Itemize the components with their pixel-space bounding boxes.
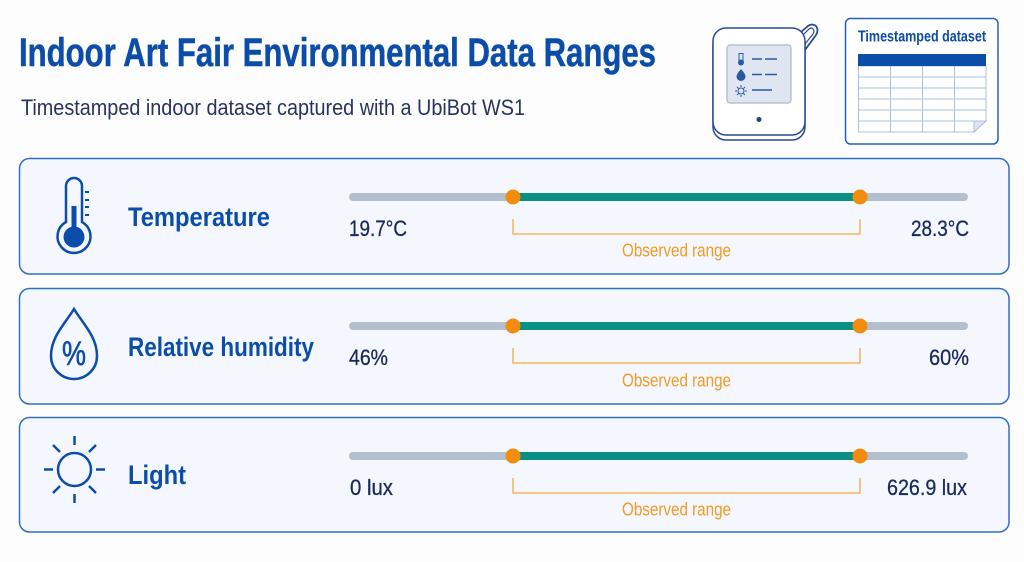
- minimum value: 0 lux: [350, 475, 393, 500]
- label: relative humidity: Relative humidity: [128, 332, 314, 362]
- title: Indoor Art Fair Environmental Data Ranges: [19, 31, 656, 75]
- range bar: temperature: [349, 190, 968, 204]
- label: light: Light: [128, 460, 186, 490]
- observed range bracket: [513, 478, 860, 493]
- panel: timestamped dataset: [846, 18, 998, 144]
- table grid: [858, 54, 986, 132]
- observed range bracket: [513, 348, 860, 363]
- range bar: light: [349, 448, 968, 464]
- maximum value: 60%: [929, 345, 969, 370]
- maximum value: 28.3°C: [911, 216, 969, 241]
- label: temperature: Temperature: [128, 202, 270, 232]
- maximum value: 626.9 lux: [887, 475, 967, 500]
- observed range label: Observed range: [622, 500, 731, 520]
- icon: thermometer: [58, 178, 90, 253]
- icon: humidity drop: [51, 309, 97, 379]
- observed range label: Observed range: [622, 240, 731, 260]
- icon: UbiBot WS1 sensor device: [713, 24, 818, 140]
- panel: light: [20, 418, 1009, 532]
- icon: humidity drop: %: [62, 335, 86, 373]
- panel: temperature: [20, 158, 1009, 274]
- observed range label: Observed range: [622, 370, 731, 390]
- range bar: relative humidity: [349, 318, 968, 334]
- observed range bracket: [513, 219, 860, 234]
- icon: sun: [44, 436, 105, 503]
- dataset heading: Timestamped dataset: [858, 28, 987, 46]
- panel: relative humidity: [20, 288, 1009, 404]
- subtitle: Timestamped indoor dataset captured with a UbiBot WS1: [21, 95, 525, 120]
- minimum value: 46%: [349, 345, 388, 370]
- minimum value: 19.7°C: [349, 216, 407, 241]
